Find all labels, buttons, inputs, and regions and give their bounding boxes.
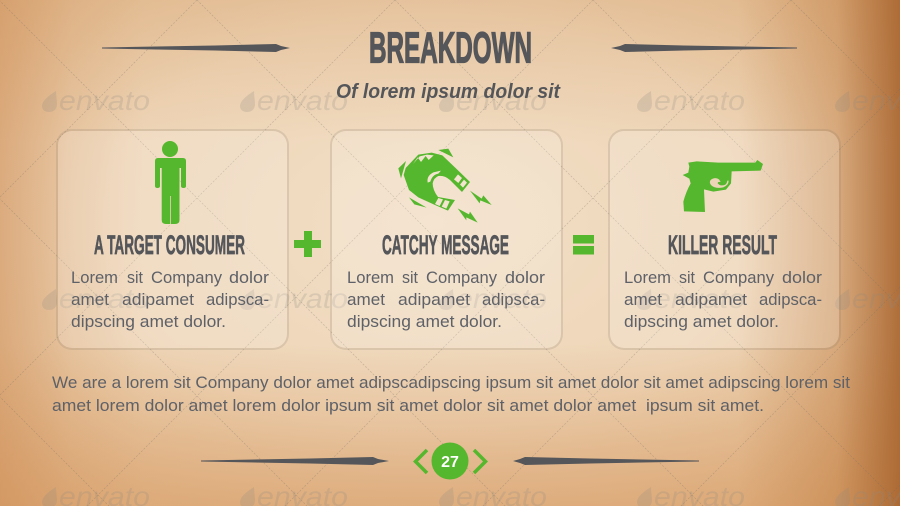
equals sign: [573, 235, 594, 254]
body text: adipsca-: [759, 290, 822, 309]
ornament: top right: [611, 44, 797, 52]
body text: dipscing amet dolor.: [71, 312, 226, 331]
body text: amet: [347, 290, 385, 309]
subtitle: Of lorem ipsum dolor sit: [336, 81, 561, 103]
body text: Lorem: [347, 268, 394, 287]
watermarks: envato: [456, 85, 547, 116]
watermarks: envato: [456, 283, 547, 314]
body text: [624, 268, 822, 331]
closing paragraph: amet lorem dolor amet lorem dolor ipsum sit amet dolor sit amet dolor amet ipsum sit amet.: [52, 396, 764, 415]
body text: amet: [71, 290, 109, 309]
arrow: next: [474, 450, 486, 473]
page number: 27: [441, 454, 459, 471]
watermarks: envato: [654, 283, 745, 314]
body text: sit: [402, 268, 418, 287]
panel: a target consumer: [56, 129, 289, 350]
body text: adipamet: [398, 290, 470, 309]
watermarks: envato: [59, 85, 150, 116]
page number badge: [416, 442, 486, 480]
watermarks: envato: [257, 283, 348, 314]
ornament: bottom left: [201, 457, 389, 465]
closing paragraph: [52, 373, 850, 415]
icon: person: [155, 141, 186, 224]
body text: amet: [624, 290, 662, 309]
plus sign: [294, 231, 321, 257]
body text: sit: [679, 268, 695, 287]
title: BREAKDOWN: [369, 24, 532, 72]
watermarks: envato: [59, 283, 150, 314]
heading: a target consumer: A TARGET CONSUMER: [94, 230, 245, 260]
heading: catchy message: CATCHY MESSAGE: [382, 230, 509, 260]
heading: killer result: KILLER RESULT: [668, 230, 777, 260]
body text: Lorem: [624, 268, 671, 287]
body text: Company: [151, 268, 222, 287]
body text: sit: [127, 268, 143, 287]
arrow: previous: [416, 450, 427, 473]
body text: adipamet: [675, 290, 747, 309]
panel: catchy message: [330, 129, 563, 350]
closing paragraph: We are a lorem sit Company dolor amet adipscadipscing ipsum sit amet dolor sit amet adipscing lorem sit: [52, 373, 850, 392]
watermarks: envato: [654, 85, 745, 116]
body text: Lorem: [71, 268, 118, 287]
body text: dolor: [229, 268, 269, 287]
body text: dipscing amet dolor.: [624, 312, 779, 331]
body text: adipsca-: [206, 290, 269, 309]
body text: [347, 268, 545, 331]
body text: dolor: [505, 268, 545, 287]
body text: adipsca-: [482, 290, 545, 309]
body text: adipamet: [122, 290, 194, 309]
body text: [71, 268, 269, 331]
body text: dolor: [782, 268, 822, 287]
circle: [432, 442, 468, 480]
ornament: top left: [102, 44, 290, 52]
body text: dipscing amet dolor.: [347, 312, 502, 331]
icon: pistol: [683, 160, 763, 212]
panel: killer result: [608, 129, 841, 350]
icon: magnet: [398, 149, 492, 223]
watermarks: envato: [257, 85, 348, 116]
ornament: bottom right: [513, 457, 699, 465]
body text: Company: [703, 268, 774, 287]
body text: Company: [426, 268, 497, 287]
